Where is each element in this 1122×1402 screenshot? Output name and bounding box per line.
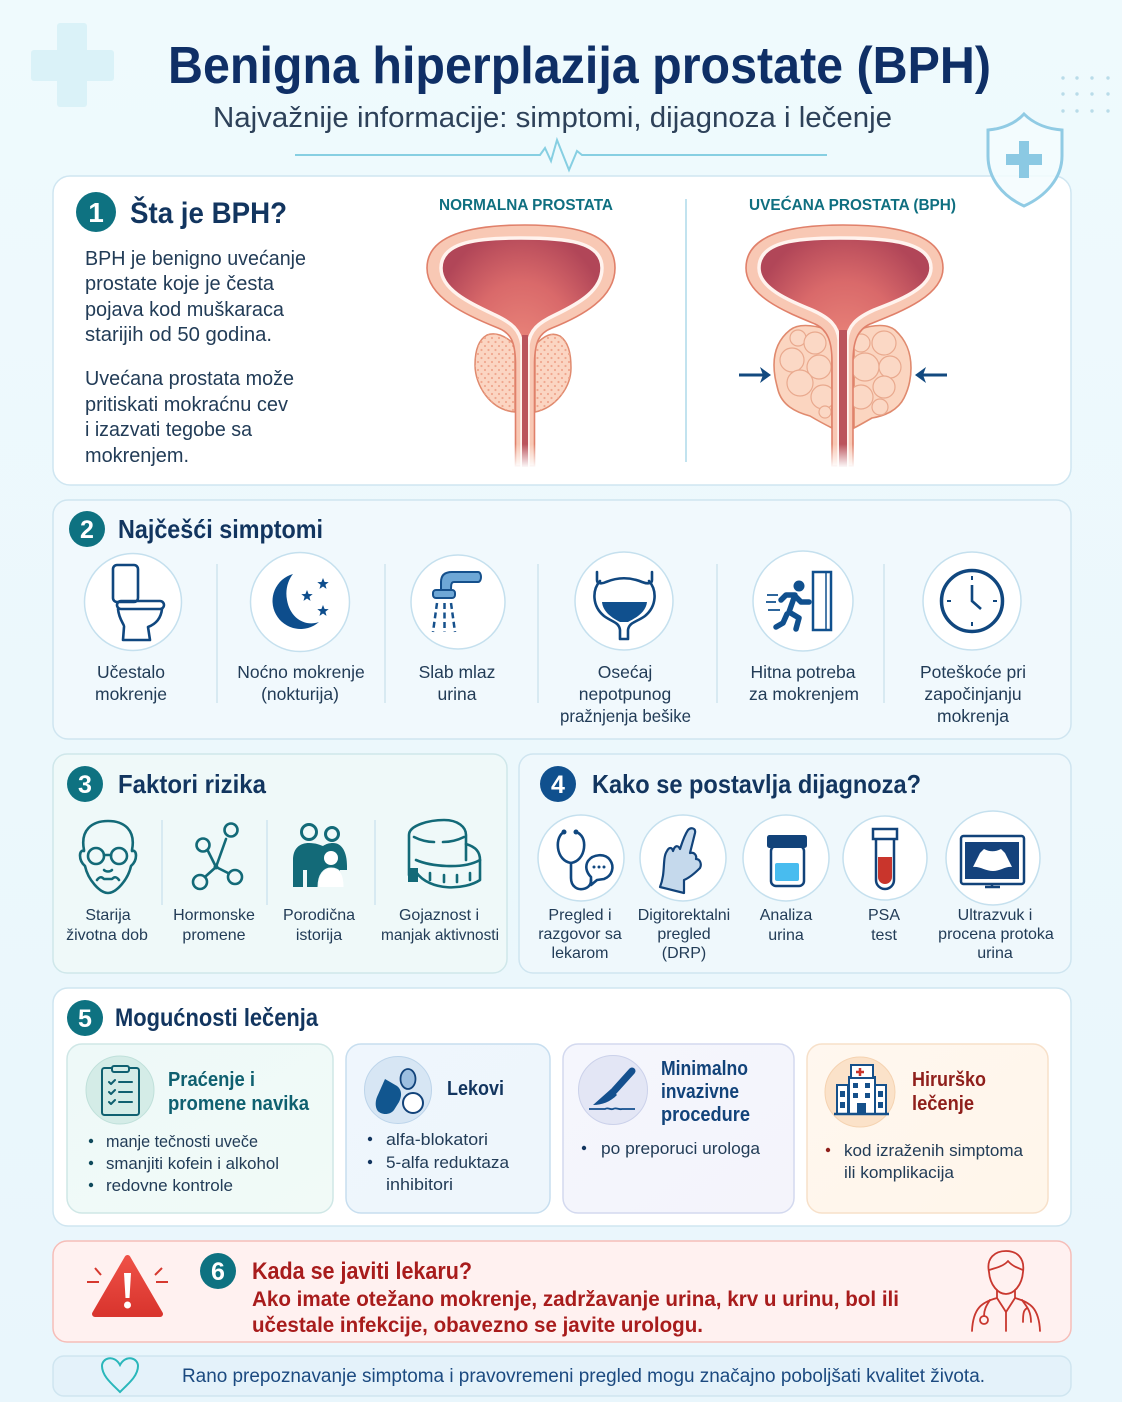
number badge 4 [540, 766, 576, 802]
test: DRE [638, 815, 730, 962]
risk: obesity: Gojaznost i [399, 907, 479, 924]
card: monitoring [67, 1044, 333, 1213]
description text: Uvećana prostata može [85, 368, 294, 390]
icon: doctor [972, 1251, 1040, 1331]
symptom: weak stream [411, 555, 505, 704]
risk: hormones: Hormonske [173, 907, 255, 924]
description text: i izazvati tegobe sa [85, 419, 253, 441]
number badge 1 [76, 192, 116, 232]
symptom: difficulty starting: mokrenja [937, 706, 1009, 726]
risk: age [66, 821, 148, 944]
symptom: nocturia: Noćno mokrenje [237, 662, 365, 682]
symptom: urgency [749, 551, 859, 704]
description text: prostate koje je česta [85, 273, 275, 295]
test: urine: urina [768, 927, 804, 944]
risk: hormones [173, 824, 255, 944]
number badge 1: 1 [88, 197, 104, 228]
card: surgery: kod izraženih simptoma [844, 1141, 1024, 1160]
card: medication: inhibitori [386, 1175, 453, 1194]
description text: BPH je benigno uvećanje [85, 248, 306, 270]
footer banner [53, 1356, 1071, 1396]
number badge 3 [67, 766, 103, 802]
number badge 6 [200, 1253, 236, 1289]
test: DRE: Digitorektalni [638, 907, 730, 924]
warning text [252, 1288, 899, 1337]
arrow left [739, 367, 771, 383]
test: DRE: pregled [657, 926, 711, 943]
symptom: weak stream: Slab mlaz [419, 662, 495, 682]
symptom: frequent urination: Učestalo [97, 662, 165, 682]
icon: warning triangle [87, 1258, 168, 1314]
risk: obesity: manjak aktivnosti [381, 927, 499, 944]
decorative cross [31, 23, 114, 107]
description text: pritiskati mokraćnu cev [85, 394, 288, 416]
illustration: normal prostate [427, 225, 615, 468]
test: consultation: Pregled i [548, 907, 612, 924]
test: PSA: test [871, 927, 897, 944]
test: PSA: PSA [868, 907, 900, 924]
label enlarged prostate: UVEĆANA PROSTATA (BPH) [749, 195, 956, 214]
card: monitoring: Praćenje i [168, 1069, 255, 1091]
description text [85, 248, 306, 467]
risk: age: Starija [85, 907, 131, 924]
heading: Najčešći simptomi [118, 514, 323, 544]
symptom: nocturia [237, 552, 365, 704]
footer text: Rano prepoznavanje simptoma i pravovremeni pregled mogu značajno poboljšati kvalitet života. [182, 1366, 985, 1387]
symptom: frequent urination [84, 554, 182, 704]
card: surgery: Hirurško [912, 1069, 986, 1091]
symptom: weak stream: urina [438, 684, 477, 704]
card: monitoring: redovne kontrole [106, 1176, 233, 1195]
card: minimally invasive: po preporuci urologa [601, 1139, 761, 1158]
symptom: urgency: za mokrenjem [749, 684, 859, 704]
number badge 4: 4 [551, 771, 565, 799]
number badge 5: 5 [78, 1005, 92, 1033]
symptom: frequent urination: mokrenje [95, 684, 167, 704]
test: ultrasound: urina [977, 945, 1013, 962]
test: ultrasound: Ultrazvuk i [958, 907, 1032, 924]
test: PSA [843, 816, 927, 944]
card: medication: Lekovi [447, 1078, 504, 1100]
panel: what is BPH [53, 176, 1071, 485]
symptom: incomplete emptying: Osećaj [598, 662, 652, 682]
card: medication: alfa-blokatori [386, 1130, 488, 1149]
subtitle: Najvažnije informacije: simptomi, dijagnoza i lečenje [213, 102, 892, 134]
test: urine: Analiza [760, 907, 812, 924]
card: minimally invasive [563, 1044, 794, 1213]
panel: symptoms [53, 500, 1071, 739]
test: ultrasound: procena protoka [938, 926, 1054, 943]
heading: Šta je BPH? [130, 196, 287, 230]
number badge 5 [67, 1000, 103, 1036]
description text: mokrenjem. [85, 445, 189, 467]
test: consultation: lekarom [552, 945, 608, 962]
panel: diagnosis [519, 754, 1071, 973]
card: surgery [807, 1044, 1048, 1213]
risk: family history: Porodična [283, 907, 355, 924]
warning text: Ako imate otežano mokrenje, zadržavanje urina, krv u urinu, bol ili [252, 1288, 899, 1311]
card: monitoring: promene navika [168, 1093, 310, 1115]
icon: heart [102, 1358, 138, 1392]
number badge 2: 2 [80, 516, 94, 544]
test: urine [743, 815, 829, 944]
test: DRE: (DRP) [662, 945, 706, 962]
test: consultation [538, 815, 624, 962]
symptom: difficulty starting: Poteškoće pri [920, 662, 1026, 682]
risk: family history: istorija [296, 927, 342, 944]
card: surgery: ili komplikacija [844, 1163, 955, 1182]
symptom: incomplete emptying [560, 552, 691, 726]
panel: treatment [53, 988, 1071, 1226]
panel: risk factors [53, 754, 507, 973]
heading: Faktori rizika [118, 769, 266, 799]
card: medication: 5-alfa reduktaza [386, 1153, 510, 1172]
decorative dots [1061, 76, 1110, 113]
illustration: enlarged prostate [746, 225, 943, 468]
card: medication [346, 1044, 550, 1213]
card: minimally invasive: procedure [661, 1104, 750, 1126]
arrow right [915, 367, 947, 383]
risk: family history [283, 824, 355, 944]
number badge 2 [69, 511, 105, 547]
number badge 3: 3 [78, 771, 92, 799]
number badge 6: 6 [211, 1258, 225, 1286]
symptom: nocturia: (nokturija) [261, 684, 339, 704]
card: minimally invasive: Minimalno [661, 1058, 748, 1080]
heading: Kako se postavlja dijagnoza? [592, 769, 921, 799]
card: monitoring: manje tečnosti uveče [106, 1132, 258, 1151]
heartbeat divider [295, 140, 827, 170]
symptom: difficulty starting: započinjanju [924, 684, 1022, 704]
warning text: učestale infekcije, obavezno se javite urologu. [252, 1314, 703, 1337]
description text: starijih od 50 godina. [85, 324, 272, 346]
risk: age: životna dob [66, 927, 148, 944]
description text: pojava kod muškaraca [85, 299, 285, 321]
decorative shield [988, 114, 1062, 206]
title: Benigna hiperplazija prostate (BPH) [168, 37, 991, 95]
card: monitoring: smanjiti kofein i alkohol [106, 1154, 279, 1173]
card: surgery: lečenje [912, 1093, 974, 1115]
label normal prostate: NORMALNA PROSTATA [439, 197, 613, 214]
panel: when to see a doctor [53, 1241, 1071, 1342]
symptom: incomplete emptying: pražnjenja bešike [560, 706, 691, 726]
symptom: incomplete emptying: nepotpunog [579, 684, 671, 704]
symptom: difficulty starting [920, 552, 1026, 726]
heading: Mogućnosti lečenja [115, 1004, 319, 1032]
test: consultation: razgovor sa [538, 926, 622, 943]
risk: hormones: promene [182, 927, 246, 944]
test: ultrasound [938, 811, 1054, 962]
card: minimally invasive: invazivne [661, 1081, 739, 1103]
heading: Kada se javiti lekaru? [252, 1258, 472, 1285]
symptom: urgency: Hitna potreba [750, 662, 856, 682]
risk: obesity [381, 820, 499, 944]
